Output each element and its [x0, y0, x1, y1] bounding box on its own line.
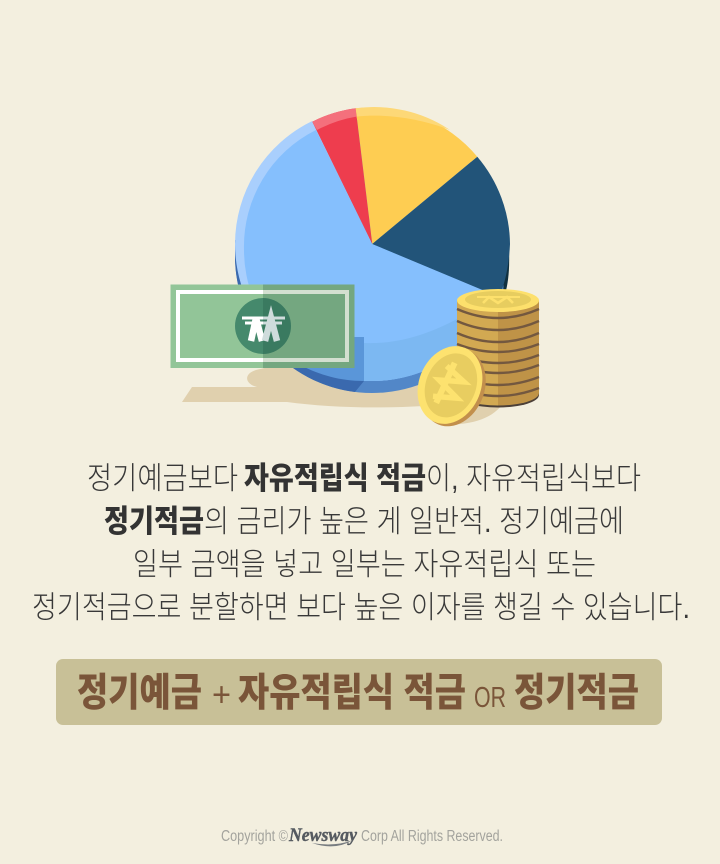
coin edge [410, 339, 497, 436]
pie slice: red [312, 108, 372, 244]
body line 3: 일부 금액을 넣고 일부는 자유적립식 또는 [133, 547, 596, 582]
pie slice: yellow [356, 107, 477, 244]
formula text: + [212, 676, 231, 714]
stack bottom edge [457, 392, 539, 407]
formula text: 정기적금 [514, 672, 639, 715]
note body right [263, 284, 354, 368]
formula text: 자유적립식 적금 [238, 672, 466, 715]
stack top coin [457, 289, 539, 312]
coin stack [457, 289, 539, 407]
formula band [56, 659, 662, 725]
body line 1: 자유적립식 적금 [244, 461, 426, 496]
icon: won sign on coin [433, 363, 464, 403]
body line 1 [87, 461, 641, 496]
body line 1: 이, 자유적립식보다 [426, 461, 641, 496]
Newsway logo: Newsway [288, 825, 358, 846]
icon: won sign [242, 318, 285, 341]
pie base [235, 119, 509, 393]
stack body [457, 300, 498, 406]
note medallion [235, 298, 263, 354]
note inner border [178, 292, 263, 360]
pie chart [235, 107, 510, 393]
copyright footer: Copyright © [221, 828, 288, 845]
formula text [77, 672, 639, 715]
copyright footer: Corp All Rights Reserved. [361, 828, 503, 845]
note body left [170, 284, 263, 368]
formula text: 정기예금 [77, 672, 202, 715]
pie slice: large blue [235, 121, 499, 381]
body line 2: 정기적금 [104, 504, 204, 539]
icon: won sign on stack [477, 296, 520, 298]
body text [32, 461, 690, 625]
pie shading [364, 297, 498, 381]
darker square on pie [300, 337, 364, 381]
illustration: pie chart, banknote and coins [170, 107, 539, 436]
body line 1: 정기예금보다 [87, 461, 238, 496]
coin face [406, 336, 494, 434]
ground shadow [182, 362, 502, 425]
pie slice: navy [372, 157, 510, 297]
band background [56, 659, 662, 725]
body line 2: 의 금리가 높은 게 일반적. 정기예금에 [204, 504, 624, 539]
leaning coin [406, 336, 497, 436]
copyright footer [221, 825, 503, 846]
stack stripes [457, 309, 539, 396]
banknote [170, 284, 354, 368]
formula text: OR [474, 682, 506, 714]
